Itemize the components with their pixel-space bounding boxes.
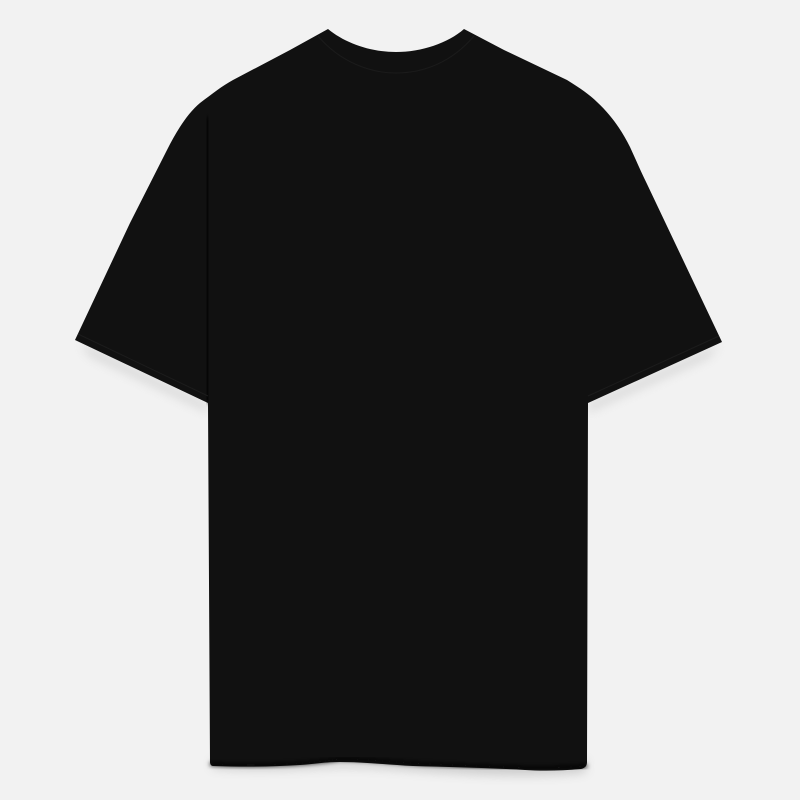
left sleeve hem stitching [78,334,208,396]
right sleeve hem stitching [588,336,719,396]
bottom hem shading [210,759,587,768]
left sleeve seam shadow [207,117,208,403]
shadow under garment [80,342,720,776]
garment body and sleeves [75,29,722,771]
t-shirt [75,29,722,771]
right sleeve seam shadow [586,115,590,403]
collar seam [318,36,474,73]
